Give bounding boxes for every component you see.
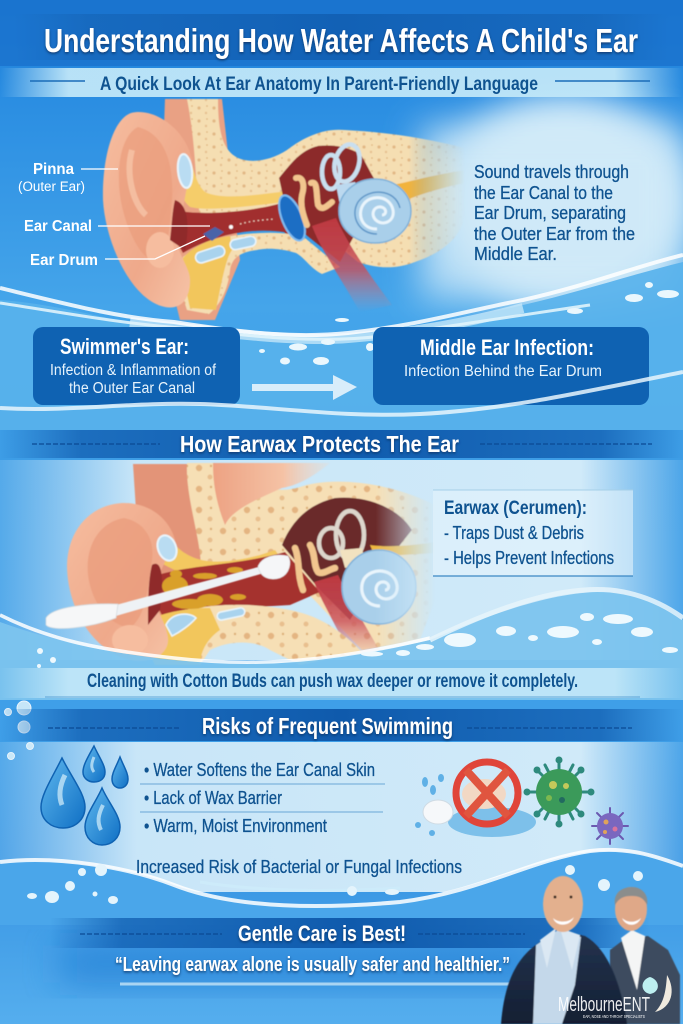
icon: green germ: [524, 756, 594, 828]
risks heading: Risks of Frequent Swimming: [202, 713, 453, 739]
water wave 4: [0, 850, 683, 925]
pinna: [103, 112, 192, 307]
ovals, lower: [194, 235, 257, 264]
earwax info box: - Traps Dust & Debris: [444, 523, 584, 543]
earwax panel background: [0, 460, 683, 660]
risks panel background: [0, 742, 683, 892]
anatomy explanation text: [474, 162, 635, 264]
cotton bud warning strip: [0, 668, 683, 698]
bubbles: [4, 701, 34, 760]
middle ear infection box: Infection Behind the Ear Drum: [404, 363, 602, 380]
gentle care band: [50, 918, 650, 983]
risk list: • Lack of Wax Barrier: [144, 788, 282, 808]
earwax heading: How Earwax Protects The Ear: [180, 431, 459, 457]
arrow: [252, 375, 357, 400]
swimmer's ear box: Infection & Inflammation of: [50, 362, 217, 379]
portrait: first doctor: [501, 876, 627, 1024]
swimmer's ear box: Swimmer's Ear:: [60, 334, 189, 359]
ear drum label: Ear Drum: [30, 252, 98, 269]
icon: water drops: [41, 746, 128, 845]
pinna label: [18, 161, 118, 194]
cerumen deposits: [162, 567, 246, 609]
quote: “Leaving earwax alone is usually safer and healthier.”: [115, 954, 510, 976]
subtitle band: A Quick Look At Ear Anatomy In Parent-Friendly Language: [100, 74, 538, 95]
earwax info box: [433, 490, 633, 576]
anatomy explanation text: the Ear Canal to the: [474, 183, 613, 203]
middle ear infection box: [373, 327, 649, 405]
ossicles: [296, 178, 332, 225]
swimmer's ear box: the Outer Ear Canal: [69, 380, 195, 397]
pinna: [67, 503, 175, 661]
middle ear infection box: Middle Ear Infection:: [420, 335, 594, 360]
water wave 2: [0, 372, 683, 415]
canal object: [203, 227, 224, 241]
earwax info box: Earwax (Cerumen):: [444, 498, 587, 519]
anatomy explanation text: Sound travels through: [474, 162, 629, 182]
throat tube: [312, 218, 392, 312]
risk list: [140, 760, 385, 836]
icon: purple germ: [592, 808, 628, 844]
earwax info box: - Helps Prevent Infections: [444, 548, 614, 568]
ear drum label: [30, 236, 205, 269]
ear canal label: Ear Canal: [24, 218, 92, 235]
cotton bud: [46, 555, 290, 629]
risk list: • Water Softens the Ear Canal Skin: [144, 760, 375, 780]
lower ovals: [166, 607, 246, 636]
icon: no cotton bud: [415, 762, 536, 837]
lower bone: [185, 604, 361, 664]
gentle care band: Gentle Care is Best!: [238, 921, 406, 946]
ossicles: [295, 545, 335, 590]
cochlea: [342, 550, 416, 624]
water wave 3: [0, 589, 683, 700]
earwax heading: [0, 430, 683, 458]
anatomy explanation text: Middle Ear.: [474, 244, 557, 264]
semicircular canals: [322, 142, 364, 189]
pinna label: Pinna: [33, 161, 74, 178]
risks heading: [0, 709, 683, 741]
ear drum: [277, 194, 307, 242]
logo: EAR, NOSE AND THROAT SPECIALISTS: [583, 1014, 645, 1019]
oval cavity, upper: [176, 153, 194, 189]
ear anatomy illustration: [103, 99, 465, 320]
anatomy explanation text: the Outer Ear from the: [474, 224, 635, 244]
semicircular canals: [319, 511, 364, 559]
risk list: • Warm, Moist Environment: [144, 816, 327, 836]
portrait: second doctor: [610, 887, 680, 1024]
cochlea: [339, 179, 411, 243]
subtitle band: [0, 68, 683, 97]
pinna label: (Outer Ear): [18, 179, 85, 194]
swimmer's ear box: [33, 327, 240, 405]
anatomy explanation text: Ear Drum, separating: [474, 203, 626, 223]
ear with cotton bud illustration: [67, 463, 435, 665]
logo: [558, 975, 672, 1019]
water wave 1: [0, 255, 683, 430]
increased risk text: Increased Risk of Bacterial or Fungal Infections: [136, 856, 462, 877]
